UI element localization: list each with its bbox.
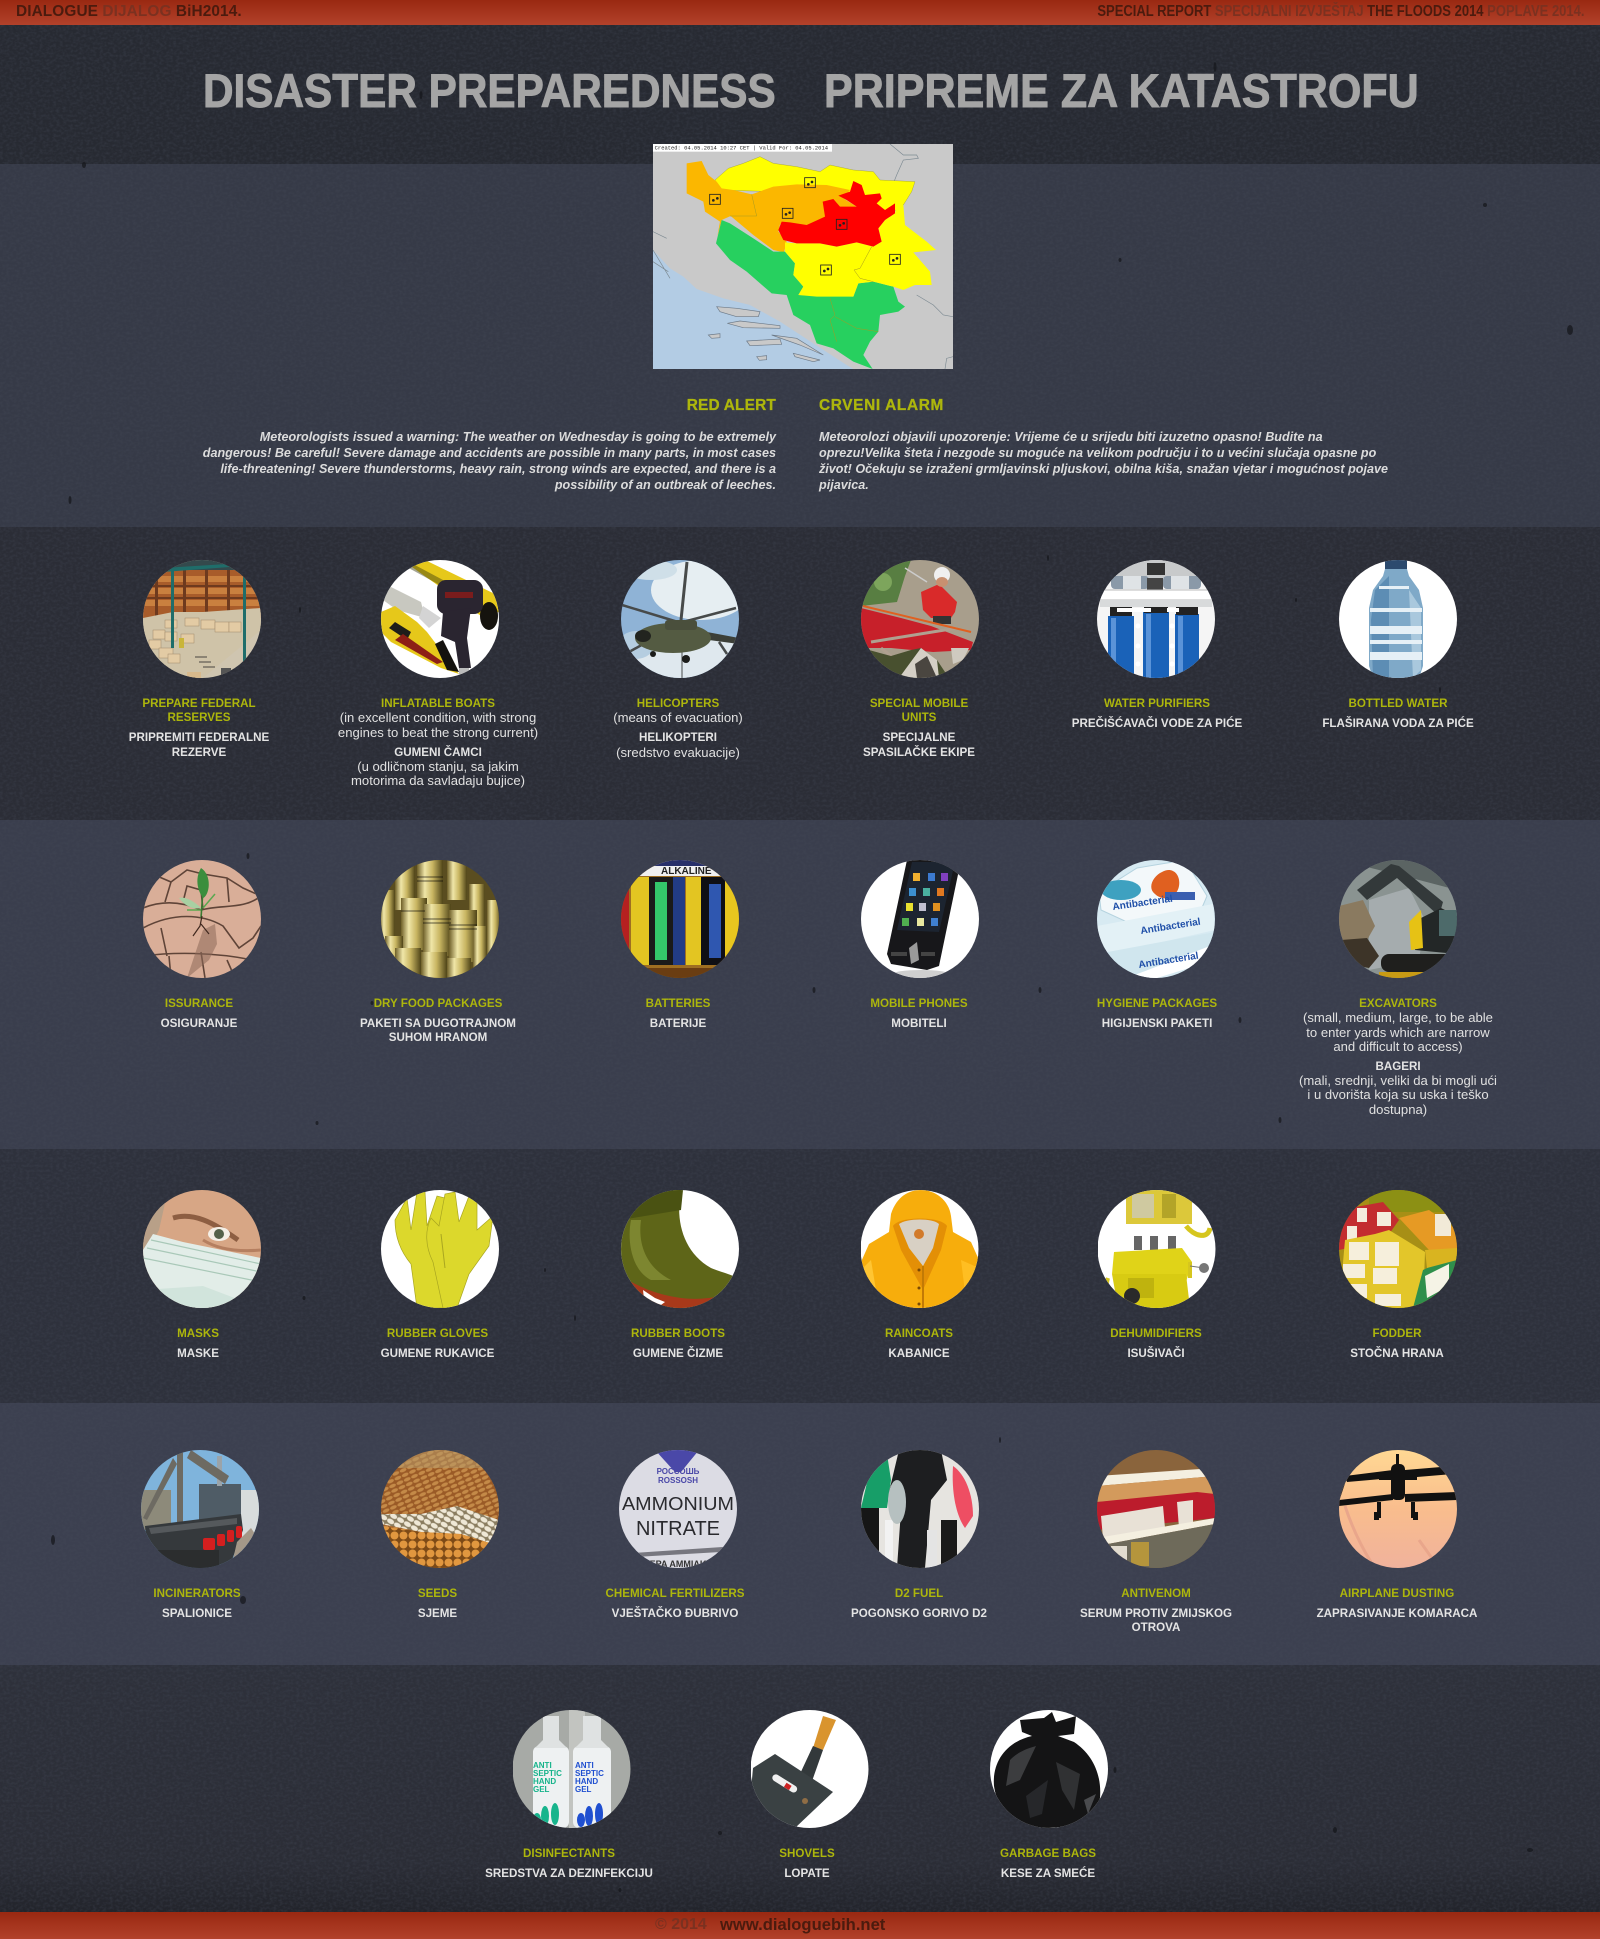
label: INCINERATORS	[153, 1587, 241, 1600]
label	[809, 997, 1029, 1031]
item: special mobile units	[861, 560, 979, 759]
item: rubber gloves	[328, 1190, 548, 1308]
item: insurance	[143, 860, 261, 1030]
paragraph: Bosnian warning: život! Očekuju se izraženi grmljavinski pljuskovi, obilna kiša, snažan vjetar i mogućnost pojave	[819, 462, 1388, 476]
label: BATTERIES	[646, 997, 710, 1010]
label: STOČNA HRANA	[1350, 1347, 1444, 1360]
label	[1046, 1327, 1266, 1361]
image: disinfectant bottles: GEL	[532, 1785, 549, 1794]
label: ANTIVENOM	[1121, 1587, 1191, 1600]
image: antibacterial wipes: Antibacterial	[1138, 951, 1200, 971]
title	[203, 64, 1419, 117]
heading: crveni alarm: CRVENI ALARM	[819, 397, 944, 414]
label	[1047, 697, 1267, 731]
label: SERUM PROTIV ZMIJSKOG	[1080, 1607, 1232, 1620]
label	[1287, 1327, 1507, 1361]
label: MOBILE PHONES	[870, 997, 968, 1010]
label: PAKETI SA DUGOTRAJNOM	[360, 1017, 516, 1030]
label	[328, 1587, 548, 1621]
label: HIGIJENSKI PAKETI	[1102, 1017, 1212, 1030]
label: (in excellent condition, with strong	[340, 710, 536, 725]
label: SPECIAL MOBILE	[870, 697, 968, 710]
item: water purifiers	[1072, 560, 1242, 730]
label: SJEME	[418, 1607, 457, 1620]
label: RAINCOATS	[885, 1327, 953, 1340]
item: seeds	[328, 1450, 548, 1568]
image: incinerator	[141, 1450, 259, 1568]
paragraph: English warning: life-threatening! Severe thunderstorms, heavy rain, strong winds are expected, and there is a	[220, 462, 776, 476]
label: RESERVES	[168, 711, 230, 724]
image: disinfectant bottles	[512, 1710, 630, 1828]
label: SPECIJALNE	[883, 731, 955, 744]
label	[459, 1847, 679, 1881]
footer website text: www.dialoguebih.net	[720, 1915, 885, 1934]
item: antivenom	[1046, 1450, 1266, 1568]
image: inflatable boat	[381, 560, 499, 678]
item: excavators	[1288, 860, 1508, 978]
label: POGONSKO GORIVO D2	[851, 1607, 987, 1620]
label: REZERVE	[172, 746, 226, 759]
image: disinfectant bottles: GEL	[574, 1785, 591, 1794]
label: (sredstvo evakuacije)	[616, 745, 740, 760]
item: airplane dusting	[1287, 1450, 1507, 1568]
item: garbage bags	[938, 1710, 1158, 1828]
image: excavator	[1339, 860, 1457, 978]
label: MASKS	[177, 1327, 219, 1340]
item: incinerators	[87, 1450, 307, 1568]
top bar	[16, 2, 1584, 20]
label: i u dvorišta koja su uska i teško	[1307, 1087, 1489, 1102]
label: PRIPREMITI FEDERALNE	[129, 731, 269, 744]
item: raincoats	[809, 1190, 1029, 1308]
image: rubber boot	[621, 1190, 739, 1308]
label: SPALIONICE	[162, 1607, 232, 1620]
label: BATERIJE	[650, 1017, 706, 1030]
title Bosnian: PRIPREME ZA KATASTROFU	[824, 64, 1419, 117]
label	[88, 1327, 308, 1361]
image: antivenom shelves	[1097, 1450, 1215, 1568]
label	[809, 1587, 1029, 1621]
label	[1047, 997, 1267, 1031]
label: dostupna)	[1369, 1102, 1427, 1117]
item: D2 fuel	[809, 1450, 1029, 1568]
label: PREPARE FEDERAL	[142, 697, 256, 710]
label: HELIKOPTERI	[639, 731, 717, 744]
label	[1287, 1587, 1507, 1621]
label: SUHOM HRANOM	[389, 1031, 487, 1044]
label: (u odličnom stanju, sa jakim	[357, 759, 519, 774]
image: alkaline batteries	[621, 860, 739, 978]
label: GUMENE ČIZME	[633, 1347, 723, 1360]
label	[89, 997, 309, 1031]
paragraph: Bosnian warning: Meteorolozi objavili upozorenje: Vrijeme će u srijedu biti izuzetno opasno! Budite na	[819, 430, 1323, 444]
paragraph: Bosnian warning: pijavica.	[819, 478, 869, 492]
panel: row 3 supplies	[0, 1149, 1600, 1403]
label	[938, 1847, 1158, 1881]
image: food cans	[381, 860, 499, 978]
paragraph: English warning: Meteorologists issued a warning: The weather on Wednesday is going to be extremely	[260, 430, 776, 444]
image: crop-dusting airplane	[1339, 1450, 1457, 1568]
image: ammonium nitrate sack: NITRATE	[636, 1518, 720, 1540]
image: antibacterial wipes	[1097, 860, 1215, 978]
label: AIRPLANE DUSTING	[1340, 1587, 1454, 1600]
label: engines to beat the strong current)	[338, 725, 538, 740]
label: HELICOPTERS	[637, 697, 719, 710]
label: RUBBER GLOVES	[387, 1327, 488, 1340]
label: SEEDS	[418, 1587, 457, 1600]
label	[1288, 997, 1508, 1117]
footer bar	[0, 1912, 1600, 1939]
image: dehumidifier	[1098, 1190, 1216, 1308]
image: rubber gloves	[381, 1190, 499, 1308]
top bar right text: SPECIAL REPORT SPECIJALNI IZVJEŠTAJ THE FLOODS 2014 POPLAVE 2014.	[1097, 3, 1584, 20]
label	[568, 1327, 788, 1361]
image: fodder sacks	[1339, 1190, 1457, 1308]
item: batteries	[568, 860, 788, 978]
image: disinfectant bottles: ANTI	[532, 1761, 551, 1770]
panel: row 2 supplies	[143, 860, 1497, 1117]
paragraph: English warning	[203, 430, 776, 492]
label: DEHUMIDIFIERS	[1110, 1327, 1202, 1340]
label	[565, 1587, 785, 1621]
item: dehumidifiers	[1046, 1190, 1266, 1308]
label	[87, 1587, 307, 1621]
image: warehouse	[143, 560, 261, 678]
paragraph: Bosnian warning: oprezu!Velika šteta i nezgode su moguće na velikom području i to u većini slučaja opasne po	[819, 446, 1376, 460]
label: GUMENE RUKAVICE	[381, 1347, 494, 1360]
label: motorima da savladaju bujice)	[351, 773, 525, 788]
label	[129, 697, 269, 759]
label: OTROVA	[1132, 1621, 1180, 1634]
image: yellow raincoat	[860, 1190, 978, 1308]
label: WATER PURIFIERS	[1104, 697, 1210, 710]
label	[568, 997, 788, 1031]
image: ammonium nitrate sack: РОССОШЬ	[657, 1467, 700, 1476]
item: bottled water	[1322, 560, 1474, 730]
image: disinfectant bottles: HAND	[574, 1777, 598, 1786]
item: disinfectants	[459, 1710, 679, 1828]
image: antibacterial wipes: Antibacterial	[1140, 917, 1202, 937]
label	[568, 697, 788, 760]
item: inflatable boats	[338, 560, 538, 788]
panel: row 1 supplies	[129, 560, 1474, 788]
item: helicopters	[613, 560, 743, 760]
item: rubber boots	[568, 1190, 788, 1308]
label: DRY FOOD PACKAGES	[374, 997, 502, 1010]
label: CHEMICAL FERTILIZERS	[606, 1587, 744, 1600]
image: rescue team	[861, 560, 979, 678]
label: UNITS	[902, 711, 936, 724]
label: DISINFECTANTS	[523, 1847, 615, 1860]
image: water purifier	[1097, 560, 1215, 678]
panel: row 4 supplies	[0, 1403, 1600, 1665]
label: BOTTLED WATER	[1349, 697, 1447, 710]
image: cracked earth with sprout	[143, 860, 261, 978]
label: MOBITELI	[891, 1017, 947, 1030]
label	[697, 1847, 917, 1881]
label: EXCAVATORS	[1359, 997, 1437, 1010]
label: (mali, srednji, veliki da bi mogli ući	[1299, 1073, 1497, 1088]
image: garbage bag	[990, 1710, 1108, 1828]
panel: row 5 supplies	[0, 1665, 1600, 1912]
label: FODDER	[1373, 1327, 1421, 1340]
image: alkaline batteries: ALKALINE	[661, 866, 712, 877]
item: dry food packages	[328, 860, 548, 978]
label: SHOVELS	[779, 1847, 835, 1860]
label: GARBAGE BAGS	[1000, 1847, 1096, 1860]
image: antibacterial wipes: Antibacterial	[1112, 894, 1174, 913]
image: seeds	[381, 1450, 499, 1568]
label: GUMENI ČAMCI	[394, 746, 482, 759]
top bar left text: DIALOGUE DIJALOG BiH2014.	[16, 3, 242, 20]
image: ammonium nitrate sack	[619, 1450, 737, 1568]
image: ammonium nitrate sack: AMMONIUM	[622, 1494, 734, 1514]
footer copyright text: © 2014	[655, 1916, 707, 1933]
label: and difficult to access)	[1333, 1039, 1463, 1054]
label: LOPATE	[784, 1867, 830, 1880]
item: masks	[88, 1190, 308, 1308]
map: weather alert: Created: 04.05.2014 10:27 CET | Valid For: 04.05.2014	[655, 146, 828, 152]
image: helicopter	[621, 560, 739, 678]
label: BAGERI	[1375, 1060, 1421, 1073]
label: PREČIŠĆAVAČI VODE ZA PIĆE	[1072, 717, 1242, 730]
item: federal reserves	[129, 560, 269, 759]
item: mobile phones	[809, 860, 1029, 978]
label: INFLATABLE BOATS	[381, 697, 495, 710]
label: KESE ZA SMEĆE	[1001, 1867, 1095, 1880]
label: SREDSTVA ZA DEZINFEKCIJU	[485, 1867, 653, 1880]
label: MASKE	[177, 1347, 219, 1360]
label: ISSURANCE	[165, 997, 233, 1010]
image: surgical mask	[143, 1190, 261, 1308]
image: ammonium nitrate sack: ROSSOSH	[658, 1476, 698, 1485]
label: VJEŠTAČKO ĐUBRIVO	[612, 1607, 738, 1620]
label: D2 FUEL	[895, 1587, 943, 1600]
label	[809, 1327, 1029, 1361]
paragraph: English warning: dangerous! Be careful! Severe damage and accidents are possible in many parts, in most cases	[203, 446, 776, 460]
paragraph: Bosnian warning	[818, 430, 1388, 492]
label: RUBBER BOOTS	[631, 1327, 725, 1340]
image: mobile phone	[861, 860, 979, 978]
heading: red alert: RED ALERT	[687, 397, 776, 414]
label	[1288, 697, 1508, 731]
label	[338, 697, 538, 788]
label: to enter yards which are narrow	[1306, 1025, 1490, 1040]
label: ZAPRASIVANJE KOMARACA	[1317, 1607, 1477, 1620]
item: chemical fertilizers	[565, 1450, 785, 1568]
image: disinfectant bottles: SEPTIC	[574, 1769, 604, 1778]
title English: DISASTER PREPAREDNESS	[203, 64, 776, 117]
label	[328, 997, 548, 1046]
label	[328, 1327, 548, 1361]
image: disinfectant bottles: ANTI	[574, 1761, 593, 1770]
image: shovel	[750, 1710, 868, 1828]
item: hygiene packages	[1047, 860, 1267, 978]
label: SPASILAČKE EKIPE	[863, 746, 975, 759]
label: ISUŠIVAČI	[1127, 1347, 1185, 1360]
item: fodder	[1287, 1190, 1507, 1308]
map: weather alert	[653, 144, 953, 369]
paragraph: English warning: possibility of an outbreak of leeches.	[555, 478, 776, 492]
image: fuel nozzles	[861, 1450, 979, 1568]
label: OSIGURANJE	[161, 1017, 237, 1030]
label: FLAŠIRANA VODA ZA PIĆE	[1322, 717, 1474, 730]
panel: red alert text	[203, 397, 1388, 492]
label: (means of evacuation)	[613, 710, 743, 725]
image: water bottle	[1339, 560, 1457, 678]
label: HYGIENE PACKAGES	[1097, 997, 1217, 1010]
image: disinfectant bottles: SEPTIC	[532, 1769, 562, 1778]
label	[809, 697, 1029, 760]
label: (small, medium, large, to be able	[1303, 1010, 1493, 1025]
label	[1046, 1587, 1266, 1636]
label: KABANICE	[888, 1347, 950, 1360]
item: shovels	[697, 1710, 917, 1828]
image: disinfectant bottles: HAND	[532, 1777, 556, 1786]
